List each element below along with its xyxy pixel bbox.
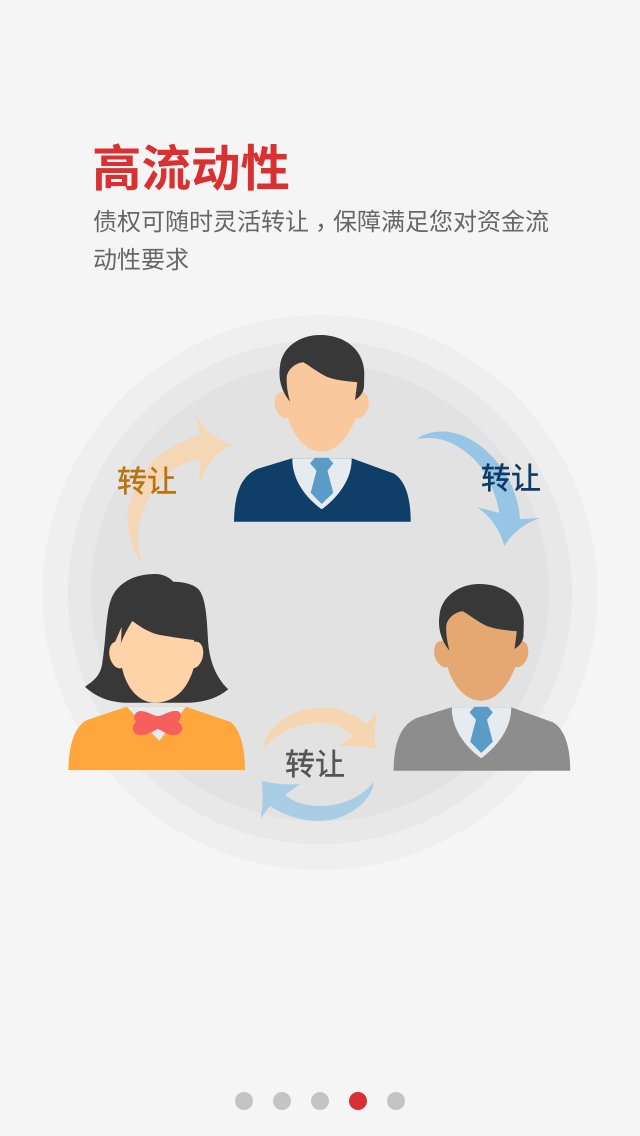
subtitle text (93, 208, 549, 274)
person: man in navy vest (234, 335, 411, 522)
arrow: peach, exchange top (263, 708, 377, 749)
person: woman in orange top (68, 574, 245, 770)
arrow: peach, woman to navy man (128, 414, 233, 563)
label: transfer, gray: 转让 (285, 740, 345, 784)
arrow: blue, exchange bottom (261, 781, 374, 821)
subtitle text: 债权可随时灵活转让，保障满足您对资金流 (93, 208, 549, 236)
concentric background circles (42, 315, 598, 870)
label: transfer, amber: 转让 (117, 457, 177, 501)
arrow: blue, navy man to gray man (417, 432, 540, 546)
title: 高流动性 (92, 142, 290, 197)
subtitle text: 动性要求 (93, 247, 189, 274)
person: man in gray vest (394, 584, 570, 771)
pagination dots (235, 1092, 405, 1110)
label: transfer, navy: 转让 (481, 454, 541, 498)
